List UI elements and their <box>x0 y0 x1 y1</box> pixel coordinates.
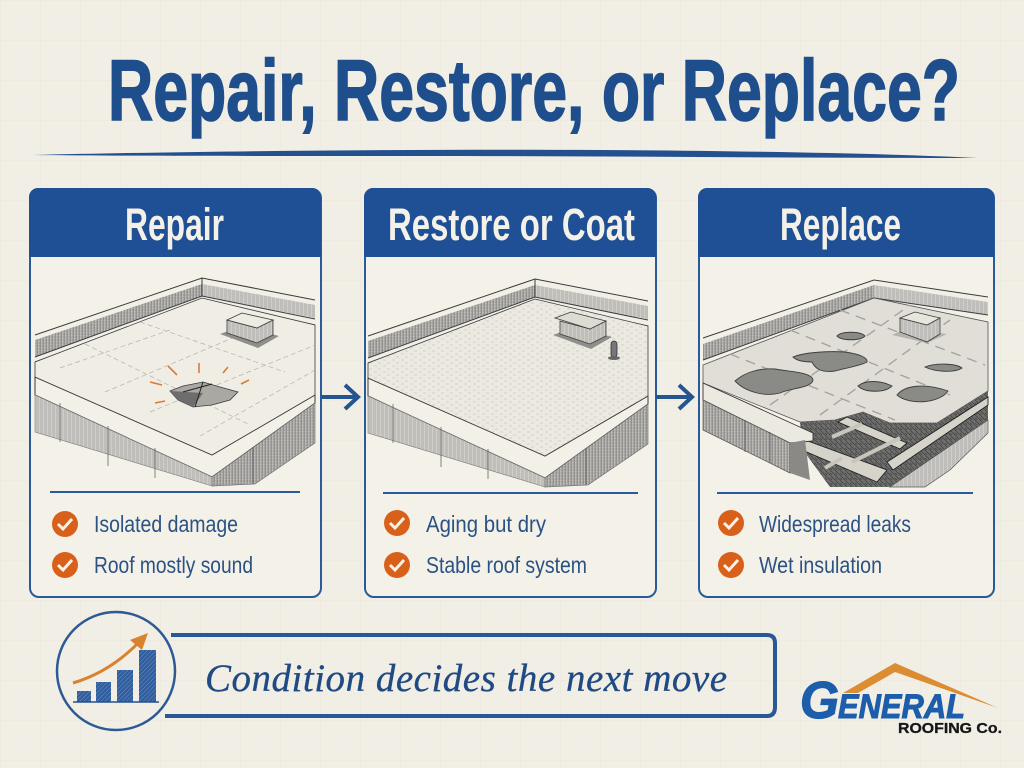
panel: restore or coat <box>364 188 656 597</box>
checklist: restore: Aging but dry <box>426 511 546 537</box>
logo: general roofing co: G <box>800 672 839 730</box>
checklist: replace: Wet insulation <box>759 552 882 578</box>
panel header: replace <box>698 188 994 257</box>
logo: general roofing co: ENERAL <box>838 688 965 726</box>
checklist: repair: Roof mostly sound <box>94 552 253 578</box>
water stains <box>735 332 962 402</box>
illustration: roof with isolated damage <box>35 278 315 486</box>
logo: general roofing co <box>800 663 1002 737</box>
roof vent <box>892 329 947 343</box>
checklist: repair <box>52 511 253 578</box>
arrow: repair to restore <box>322 385 358 409</box>
checklist: replace: Widespread leaks <box>759 511 911 537</box>
heading: replace: Replace <box>780 199 901 250</box>
checklist: replace <box>718 510 911 578</box>
arrow: restore to replace <box>656 385 692 409</box>
heading: repair: Repair <box>125 199 224 250</box>
checklist: repair: Isolated damage <box>94 511 238 537</box>
illustration: failed roof <box>703 280 988 487</box>
panel header: restore <box>364 188 656 257</box>
checklist: restore: Stable roof system <box>426 552 587 578</box>
banner text: Condition decides the next move <box>205 657 727 700</box>
logo: general roofing co: ROOFING Co. <box>898 721 1002 737</box>
title underline <box>33 150 978 158</box>
heading: restore or coat: Restore or Coat <box>388 199 635 250</box>
damage rays <box>150 363 249 403</box>
panel: repair <box>29 188 321 597</box>
illustration: coated roof <box>368 279 648 487</box>
deteriorated surface <box>703 298 988 423</box>
icon: growth chart <box>57 612 175 730</box>
exposed deck <box>800 391 988 487</box>
panel: replace <box>698 188 994 597</box>
panel header: repair <box>29 188 321 257</box>
parapet front <box>703 383 813 443</box>
banner: condition decides the next move <box>165 635 775 716</box>
checklist: restore <box>384 510 587 578</box>
